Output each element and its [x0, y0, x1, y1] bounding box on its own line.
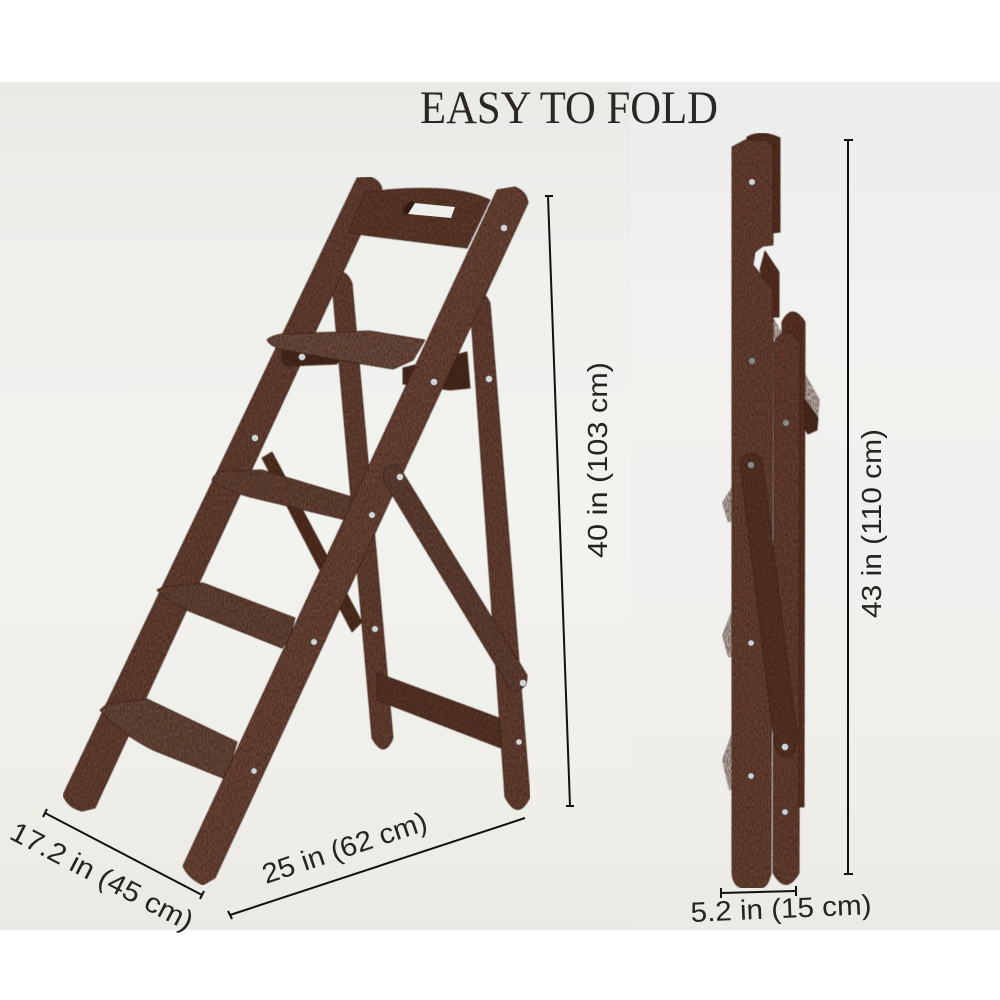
- back leg: [782, 312, 805, 807]
- dimension: folded depth: 5.2 in (15 cm): [690, 889, 872, 928]
- diagonal brace: [383, 465, 527, 692]
- bolts on open ladder: [251, 225, 526, 774]
- dimension: length: 25 in (62 cm): [258, 806, 431, 890]
- cross strut: [262, 452, 362, 632]
- folded top step, dark side: [802, 395, 818, 434]
- folded steps at left: [722, 485, 733, 790]
- front folded leg: [773, 332, 800, 884]
- photo background: right: [630, 82, 1000, 930]
- front right rail: [183, 187, 528, 885]
- rear leg: [470, 292, 530, 810]
- stepladder, open view: [63, 177, 530, 885]
- lower rear crossbar: [377, 673, 501, 748]
- step 2: [212, 470, 352, 520]
- piece below notch: [760, 251, 779, 317]
- dimension: height folded: 43 in (110 cm): [856, 429, 887, 618]
- bolts on folded ladder: [748, 179, 789, 815]
- dimension: width: 17.2 in (45 cm): [5, 816, 199, 937]
- photo background: left: [0, 82, 630, 930]
- back inner leg: [332, 272, 393, 749]
- dimension: height open: 40 in (103 cm): [582, 362, 613, 558]
- step 4: [100, 699, 237, 778]
- title: EASY TO FOLD: [420, 82, 718, 134]
- handle slot: [408, 203, 455, 218]
- handle slot shadow: [403, 202, 418, 215]
- back left rail: [63, 177, 382, 811]
- rear handle section: [747, 133, 780, 233]
- stepladder, folded view: [722, 133, 820, 888]
- folded brace: [740, 453, 797, 757]
- top step: [267, 331, 425, 369]
- main rail with notch: [732, 140, 773, 888]
- handle board: [348, 188, 490, 248]
- step 3: [157, 583, 295, 648]
- folded top step, light side: [773, 317, 820, 418]
- top step supports: [282, 350, 470, 390]
- dimension: length: [228, 806, 525, 919]
- dimension: height open: [545, 196, 613, 806]
